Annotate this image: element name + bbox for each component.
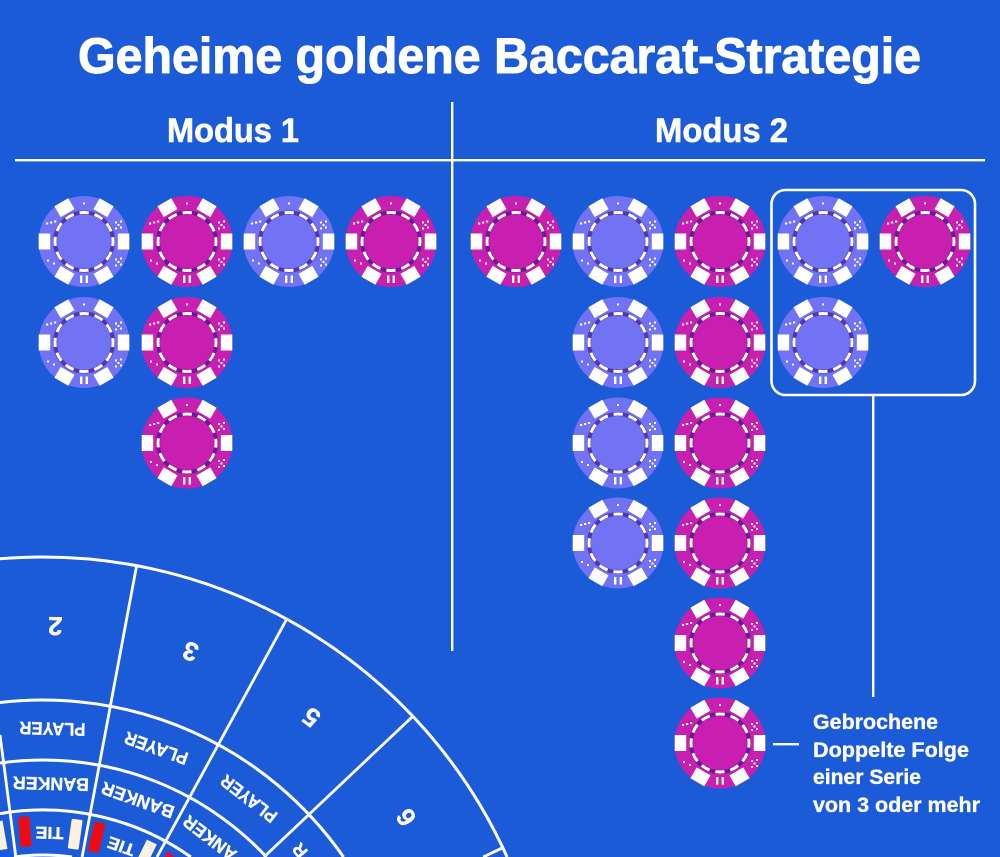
wheel TIE labels <box>35 823 138 857</box>
wheel rings <box>0 557 507 857</box>
chip: column 1 row 1 <box>470 196 562 287</box>
chip: column 4 row 1 <box>778 196 868 287</box>
chip: column 3 row 6 <box>674 698 766 788</box>
heading: Modus 2: Modus 2 <box>655 112 788 150</box>
wheel numbers: 3 <box>179 635 202 668</box>
title: Geheime goldene Baccarat-Strategie <box>78 28 921 84</box>
chip: column 2 row 3 <box>572 398 664 488</box>
chip: column 3 row 5 <box>674 598 766 688</box>
chip: column 1 row 2 <box>38 297 130 388</box>
chip: column 3 row 1 <box>244 196 334 287</box>
connector line: box to callout <box>872 395 874 697</box>
wheel numbers: 6 <box>390 803 423 832</box>
chip: column 2 row 4 <box>572 498 664 588</box>
chip: column 2 row 3 <box>142 398 232 488</box>
wheel TIE labels: TIE <box>35 823 64 842</box>
wheel PLAYER labels: PLAYER <box>122 728 191 769</box>
wheel cream markers <box>0 819 157 857</box>
chip: column 3 row 2 <box>674 297 766 388</box>
chip: column 3 row 3 <box>674 398 766 488</box>
wheel PLAYER labels: PLAYER <box>217 771 281 827</box>
callout text: Gebrochene <box>813 711 938 734</box>
chip: column 3 row 1 <box>674 196 766 287</box>
chip: column 2 row 1 <box>572 196 664 287</box>
callout text: einer Serie <box>813 766 921 789</box>
highlight box <box>772 190 975 395</box>
callout text: Doppelte Folge <box>813 739 969 762</box>
callout text: von 3 oder mehr <box>813 794 980 817</box>
panel: Modus 2 chips <box>470 196 970 788</box>
wheel spokes <box>0 566 503 857</box>
wheel red markers <box>18 816 175 857</box>
wheel numbers: 5 <box>297 701 326 734</box>
chip: column 3 row 4 <box>674 498 766 588</box>
chip: column 4 row 2 <box>778 297 868 388</box>
wheel PLAYER labels <box>19 718 312 857</box>
wheel BANKER labels: BANKER <box>13 773 89 795</box>
baccarat score wheel <box>0 557 507 857</box>
wheel numbers: 2 <box>48 611 63 641</box>
chip: column 2 row 2 <box>572 297 664 388</box>
chip: column 1 row 1 <box>38 196 130 287</box>
chip: column 4 row 1 <box>346 196 436 287</box>
chip: column 2 row 2 <box>142 297 232 388</box>
wheel BANKER labels: BANKER <box>99 778 177 822</box>
panel: Modus 1 chips <box>38 196 436 488</box>
wheel numbers <box>48 611 423 832</box>
heading: Modus 1: Modus 1 <box>167 112 299 150</box>
chip: column 2 row 1 <box>142 196 232 287</box>
callout text <box>813 711 980 817</box>
chip: column 5 row 1 <box>880 196 970 287</box>
wheel PLAYER labels: PLAYER <box>19 718 86 740</box>
connector line: chip to callout <box>773 743 799 745</box>
wheel BANKER labels <box>13 773 240 857</box>
